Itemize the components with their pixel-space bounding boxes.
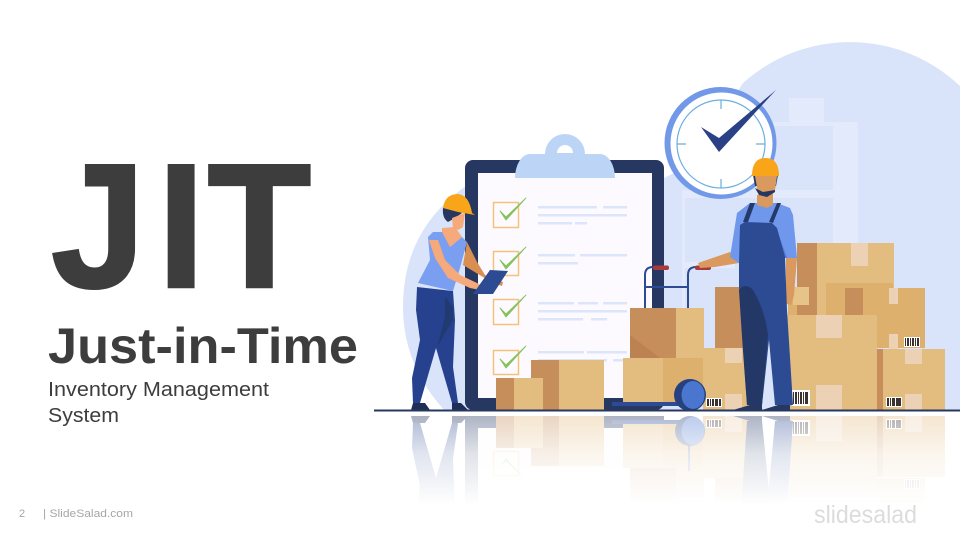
logo: slidesalad: slidesalad (814, 501, 917, 529)
neck (757, 193, 773, 208)
check marks (500, 198, 526, 368)
right stack of boxes (703, 243, 945, 410)
neck (442, 227, 462, 247)
overall straps (743, 203, 781, 223)
hard hat (752, 158, 779, 176)
clipboard clip (515, 134, 615, 178)
beard (755, 188, 775, 197)
footer: site: | SlideSalad.com (43, 508, 133, 520)
front boxes (496, 360, 604, 410)
background blob: left (403, 186, 470, 411)
wheel (674, 379, 706, 411)
left arm (698, 252, 739, 268)
floor reflection (411, 416, 945, 492)
right arm (783, 258, 797, 305)
lower box (623, 358, 663, 402)
clipboard (465, 134, 664, 410)
shirt (730, 203, 797, 263)
shoes (733, 405, 762, 410)
overalls (739, 222, 793, 405)
upper box (630, 308, 676, 358)
sideburns (753, 175, 778, 186)
worker: woman (411, 194, 508, 410)
shirt (418, 232, 467, 291)
checklist text lines (538, 206, 627, 362)
background blob: right with warehouse shapes (660, 42, 960, 411)
subtitle (48, 379, 269, 427)
face (452, 213, 465, 230)
hair (443, 204, 462, 222)
front arm (429, 240, 485, 290)
tablet (473, 270, 508, 294)
hard hat (443, 194, 475, 215)
clock (664, 87, 776, 199)
footer: page number: 2 (19, 508, 25, 520)
truck base (612, 402, 686, 406)
checkboxes (494, 202, 518, 374)
back arm (463, 242, 503, 286)
clock check mark (701, 90, 776, 152)
face (755, 176, 777, 197)
ground line (374, 410, 960, 412)
worker: man (698, 158, 797, 410)
hand truck with boxes (612, 266, 711, 411)
illustration scene (411, 87, 945, 411)
subtitle: System (48, 405, 119, 427)
truck frame (645, 267, 696, 392)
title: JIT: JIT (51, 127, 311, 325)
handles (653, 266, 669, 270)
pants (412, 287, 458, 403)
heading: Just-in-Time: Just-in-Time (48, 318, 358, 374)
shoes (411, 403, 430, 410)
subtitle: Inventory Management (48, 379, 269, 401)
